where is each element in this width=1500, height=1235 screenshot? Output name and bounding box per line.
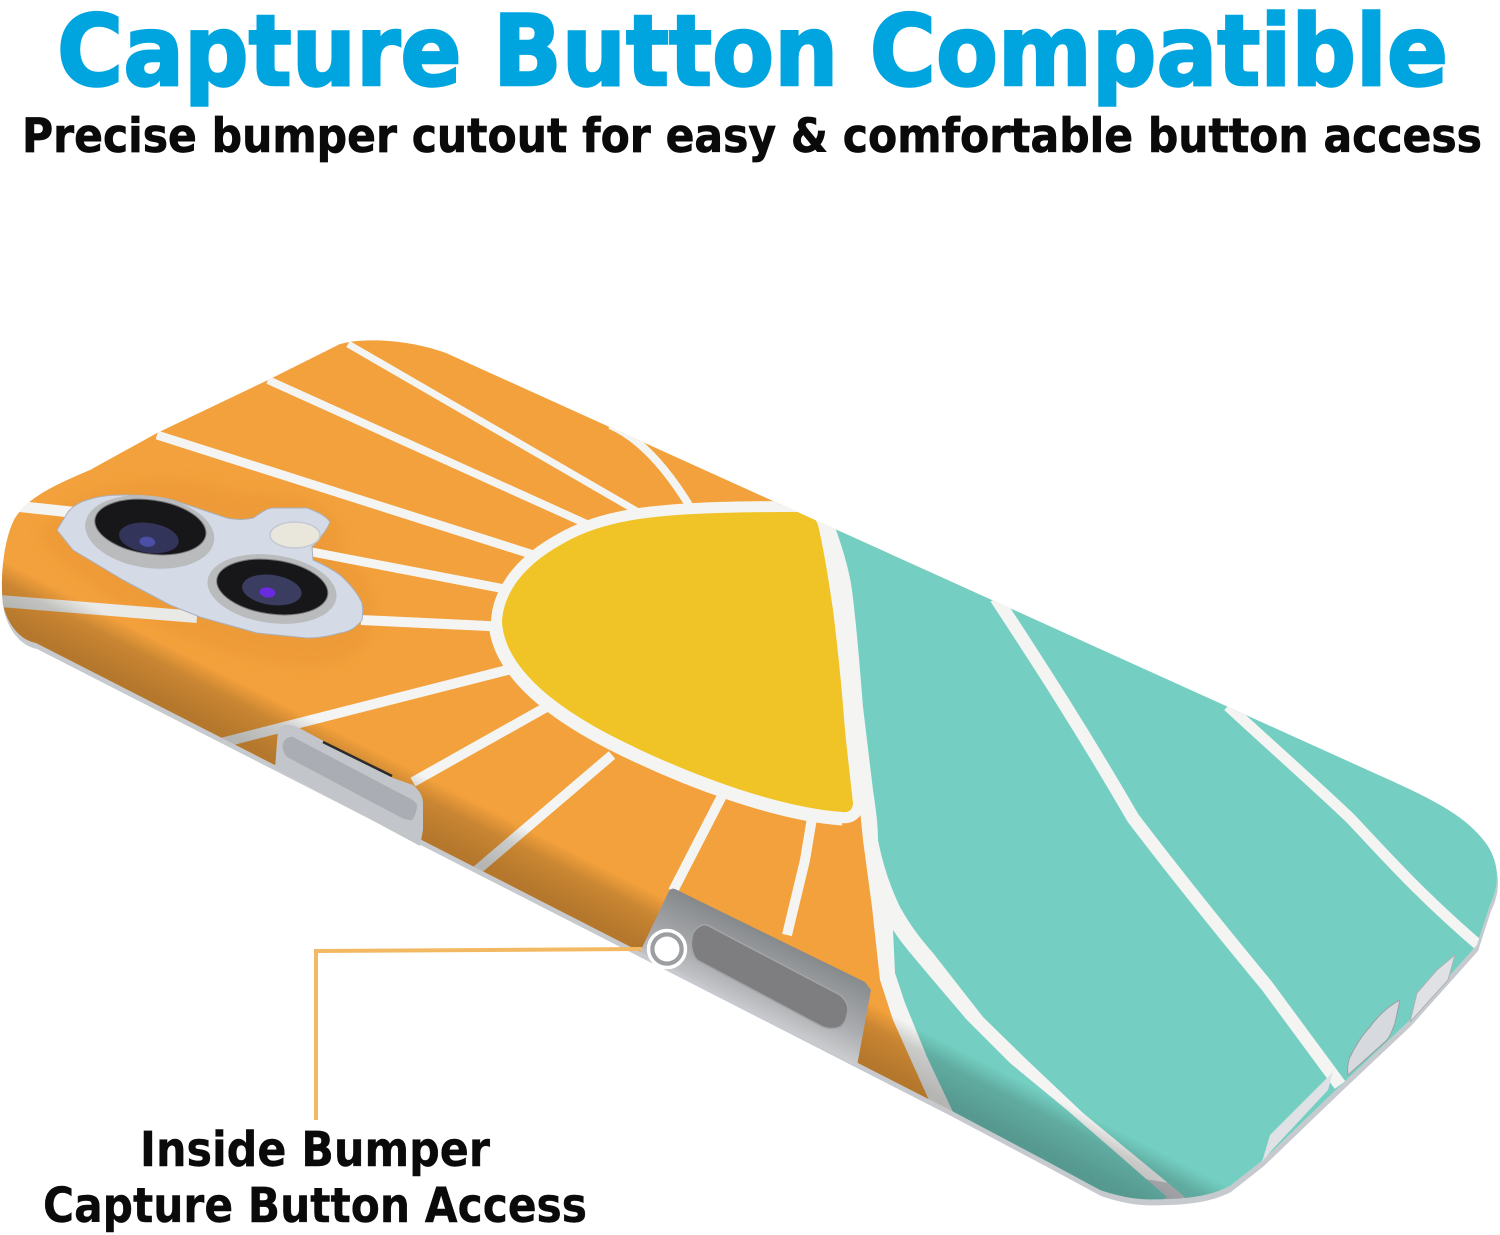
callout line — [316, 949, 642, 1120]
volume button cutout — [275, 725, 423, 846]
side wall shading — [2, 565, 1223, 1200]
camera emboss — [40, 482, 375, 665]
callout label — [43, 1122, 587, 1234]
left port — [1262, 1072, 1333, 1162]
capture button cutout — [640, 889, 871, 1066]
sun — [502, 512, 853, 812]
callout marker — [648, 930, 686, 968]
teal stripe one — [996, 598, 1340, 1085]
callout label: Inside Bumper — [140, 1122, 490, 1178]
teal lower panel — [893, 930, 1167, 1200]
bottom ports — [1262, 955, 1455, 1162]
camera island — [57, 487, 363, 638]
callout label: Capture Button Access — [43, 1178, 587, 1234]
phone case illustration — [0, 330, 1500, 1235]
flash — [270, 522, 320, 548]
teal main panel — [835, 527, 1500, 1235]
volume button pill — [283, 737, 417, 820]
sun rays — [0, 344, 815, 935]
case rim — [3, 346, 1498, 1205]
orange sunburst background — [2, 340, 1000, 1136]
lens surround — [57, 495, 363, 638]
teal stripe two — [1228, 706, 1482, 948]
lens two — [203, 546, 341, 632]
sun lower ring — [502, 622, 843, 812]
capture button pill — [691, 925, 848, 1028]
lens one — [80, 487, 219, 577]
case surface artwork — [0, 330, 1500, 1235]
right port — [1410, 955, 1455, 1022]
white band beside teal — [790, 495, 1500, 1235]
middle port — [1348, 1000, 1400, 1075]
